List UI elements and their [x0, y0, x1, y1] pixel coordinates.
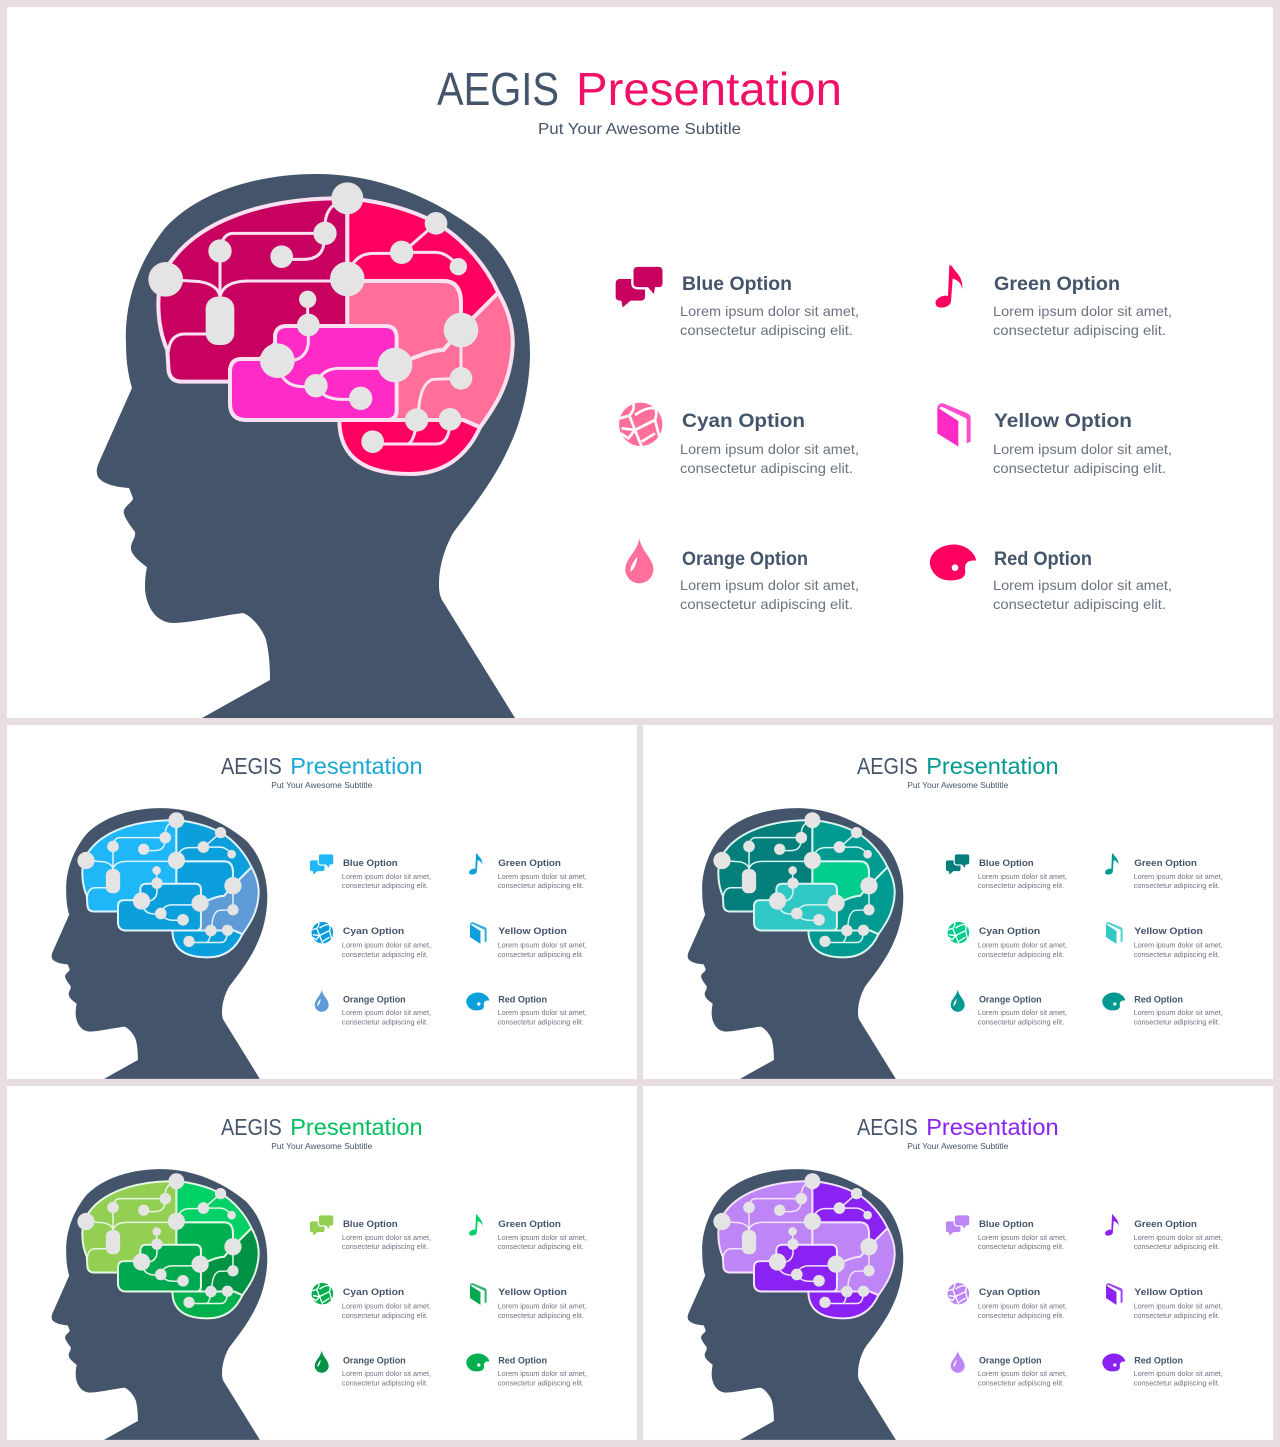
- option: Yellow Option: Yellow Option: [1134, 1287, 1203, 1298]
- option: Yellow Option: consectetur adipiscing elit.: [498, 1313, 584, 1320]
- option: Red Option: consectetur adipiscing elit.: [498, 1381, 584, 1388]
- option: Blue Option: Blue Option: [979, 1219, 1034, 1230]
- option: Blue Option: Blue Option: [682, 274, 792, 295]
- option: Yellow Option: Lorem ipsum dolor sit amet,: [498, 1303, 587, 1310]
- option: Red Option: [1134, 995, 1223, 1027]
- subtitle: Put Your Awesome Subtitle: [271, 781, 373, 790]
- icon: water drop: [315, 989, 329, 1012]
- option: Green Option: [498, 1219, 587, 1251]
- option: Green Option: Lorem ipsum dolor sit amet,: [993, 303, 1172, 319]
- option: Red Option: Red Option: [1134, 1356, 1183, 1367]
- option: Yellow Option: Yellow Option: [1134, 926, 1203, 937]
- option: Yellow Option: Yellow Option: [994, 411, 1132, 432]
- option: Red Option: Red Option: [498, 1356, 547, 1367]
- brain circuit diagram: [77, 1173, 259, 1318]
- icon: music note: [469, 853, 483, 875]
- option: Green Option: Green Option: [498, 1219, 561, 1230]
- icon: globe: [948, 922, 969, 944]
- subtitle: Put Your Awesome Subtitle: [271, 1142, 373, 1151]
- option: Cyan Option: Cyan Option: [979, 926, 1040, 937]
- option: Green Option: [1134, 1219, 1223, 1251]
- option: Orange Option: Orange Option: [682, 549, 808, 570]
- option: Cyan Option: [680, 411, 859, 476]
- title: AEGIS: [221, 753, 282, 779]
- option: Green Option: [498, 858, 587, 890]
- option: Orange Option: [342, 995, 431, 1027]
- option: Green Option: consectetur adipiscing elit.: [993, 322, 1166, 338]
- icon: speech bubbles: [310, 1215, 334, 1235]
- option: Blue Option: Lorem ipsum dolor sit amet,: [978, 1235, 1067, 1242]
- option: Yellow Option: [498, 926, 587, 959]
- option: Cyan Option: Lorem ipsum dolor sit amet,: [342, 1303, 431, 1310]
- option: Yellow Option: [993, 411, 1172, 476]
- panel: purple slide: [643, 1086, 1273, 1440]
- option: Cyan Option: Cyan Option: [343, 926, 404, 937]
- title: AEGIS: [221, 1114, 282, 1140]
- option: Orange Option: [342, 1356, 431, 1388]
- option: Orange Option: Lorem ipsum dolor sit amet,: [978, 1371, 1067, 1378]
- option: Orange Option: Lorem ipsum dolor sit amet,: [680, 577, 859, 593]
- option: Cyan Option: Cyan Option: [682, 411, 805, 432]
- option: Yellow Option: Lorem ipsum dolor sit amet,: [1134, 942, 1223, 949]
- option: Blue Option: [342, 1219, 431, 1251]
- option: Red Option: Lorem ipsum dolor sit amet,: [993, 577, 1172, 593]
- option: Red Option: consectetur adipiscing elit.: [1134, 1020, 1220, 1027]
- option: Yellow Option: consectetur adipiscing elit.: [1134, 1313, 1220, 1320]
- option: Orange Option: consectetur adipiscing elit.: [342, 1020, 428, 1027]
- option: Red Option: Red Option: [498, 995, 547, 1006]
- icon: music note: [469, 1214, 483, 1236]
- option: Orange Option: Orange Option: [343, 1356, 406, 1367]
- option: Green Option: Green Option: [1134, 1219, 1197, 1230]
- option: Green Option: Lorem ipsum dolor sit amet,: [498, 874, 587, 881]
- icon: globe: [948, 1283, 969, 1305]
- option: Cyan Option: [342, 926, 431, 959]
- brain circuit diagram: [713, 812, 895, 957]
- option: Green Option: Lorem ipsum dolor sit amet,: [1134, 874, 1223, 881]
- icon: speech bubbles: [946, 854, 970, 874]
- title: Presentation: [290, 1114, 423, 1140]
- option: Red Option: Lorem ipsum dolor sit amet,: [498, 1371, 587, 1378]
- option: Orange Option: Orange Option: [979, 995, 1042, 1006]
- option: Red Option: [993, 549, 1172, 612]
- option: Red Option: consectetur adipiscing elit.: [993, 596, 1166, 612]
- option: Red Option: Lorem ipsum dolor sit amet,: [498, 1010, 587, 1017]
- title: Presentation: [290, 753, 423, 779]
- panel: green slide: [7, 1086, 637, 1440]
- icon: palette: [1102, 1354, 1125, 1371]
- option: Blue Option: consectetur adipiscing elit.: [978, 883, 1064, 890]
- option: Green Option: Lorem ipsum dolor sit amet,: [1134, 1235, 1223, 1242]
- title: Presentation: [576, 63, 842, 115]
- option: Blue Option: consectetur adipiscing elit.: [680, 322, 853, 338]
- icon: speech bubbles: [310, 854, 334, 874]
- icon: book: [937, 403, 971, 447]
- option: Green Option: consectetur adipiscing elit.: [1134, 1244, 1220, 1251]
- option: Cyan Option: Cyan Option: [343, 1287, 404, 1298]
- option: Yellow Option: Lorem ipsum dolor sit amet,: [498, 942, 587, 949]
- icon: speech bubbles: [616, 266, 664, 307]
- option: Orange Option: consectetur adipiscing elit.: [680, 596, 853, 612]
- icon: palette: [1102, 993, 1125, 1010]
- icon: music note: [935, 265, 962, 308]
- option: Blue Option: [342, 858, 431, 890]
- option: Blue Option: Lorem ipsum dolor sit amet,: [342, 874, 431, 881]
- option: Cyan Option: [342, 1287, 431, 1320]
- option: Yellow Option: consectetur adipiscing elit.: [498, 952, 584, 959]
- icon: book: [470, 922, 487, 944]
- option: Green Option: consectetur adipiscing elit.: [498, 883, 584, 890]
- option: Green Option: consectetur adipiscing elit.: [1134, 883, 1220, 890]
- option: Orange Option: consectetur adipiscing elit.: [342, 1381, 428, 1388]
- title: AEGIS: [857, 753, 918, 779]
- title: Presentation: [926, 753, 1059, 779]
- option: Red Option: Lorem ipsum dolor sit amet,: [1134, 1010, 1223, 1017]
- icon: globe: [312, 1283, 333, 1305]
- option: Yellow Option: Lorem ipsum dolor sit amet,: [1134, 1303, 1223, 1310]
- option: Green Option: Green Option: [994, 274, 1120, 295]
- option: Blue Option: consectetur adipiscing elit.: [342, 1244, 428, 1251]
- option: Green Option: [993, 274, 1172, 338]
- option: Red Option: Red Option: [994, 549, 1092, 570]
- icon: music note: [1105, 1214, 1119, 1236]
- subtitle: Put Your Awesome Subtitle: [907, 1142, 1009, 1151]
- option: Blue Option: Lorem ipsum dolor sit amet,: [680, 303, 859, 319]
- head silhouette: [97, 174, 530, 718]
- option: Cyan Option: consectetur adipiscing elit.: [342, 1313, 428, 1320]
- icon: water drop: [951, 1350, 965, 1373]
- icon: water drop: [315, 1350, 329, 1373]
- option: Blue Option: Blue Option: [343, 1219, 398, 1230]
- icon: water drop: [951, 989, 965, 1012]
- option: Blue Option: consectetur adipiscing elit.: [978, 1244, 1064, 1251]
- option: Cyan Option: Lorem ipsum dolor sit amet,: [978, 1303, 1067, 1310]
- option: Cyan Option: Lorem ipsum dolor sit amet,: [342, 942, 431, 949]
- brain circuit diagram: [713, 1173, 895, 1318]
- panel: teal slide: [643, 725, 1273, 1079]
- option: Orange Option: Lorem ipsum dolor sit amet,: [978, 1010, 1067, 1017]
- icon: book: [470, 1283, 487, 1305]
- icon: book: [1106, 922, 1123, 944]
- brain circuit diagram: [148, 182, 513, 474]
- option: Yellow Option: consectetur adipiscing elit.: [1134, 952, 1220, 959]
- option: Red Option: Red Option: [1134, 995, 1183, 1006]
- option: Cyan Option: consectetur adipiscing elit.: [680, 460, 853, 476]
- option: Cyan Option: consectetur adipiscing elit.: [978, 952, 1064, 959]
- option: Blue Option: Blue Option: [979, 858, 1034, 869]
- icon: music note: [1105, 853, 1119, 875]
- option: Red Option: [498, 1356, 587, 1388]
- option: Blue Option: [680, 274, 859, 338]
- head silhouette: [688, 808, 903, 1079]
- option: Blue Option: [978, 1219, 1067, 1251]
- option: Orange Option: Lorem ipsum dolor sit amet,: [342, 1010, 431, 1017]
- option: Orange Option: Lorem ipsum dolor sit amet,: [342, 1371, 431, 1378]
- option: Cyan Option: Lorem ipsum dolor sit amet,: [680, 441, 859, 457]
- option: Yellow Option: Yellow Option: [498, 926, 567, 937]
- option: Orange Option: [978, 1356, 1067, 1388]
- brain circuit diagram: [77, 812, 259, 957]
- option: Yellow Option: Yellow Option: [498, 1287, 567, 1298]
- panel: main pink slide: [7, 7, 1273, 718]
- head silhouette: [52, 808, 267, 1079]
- option: Orange Option: [978, 995, 1067, 1027]
- option: Cyan Option: [978, 1287, 1067, 1320]
- title: Presentation: [926, 1114, 1059, 1140]
- option: Cyan Option: consectetur adipiscing elit.: [342, 952, 428, 959]
- option: Yellow Option: consectetur adipiscing elit.: [993, 460, 1166, 476]
- option: Orange Option: Orange Option: [979, 1356, 1042, 1367]
- option: Yellow Option: [1134, 926, 1223, 959]
- option: Red Option: consectetur adipiscing elit.: [1134, 1381, 1220, 1388]
- option: Red Option: Lorem ipsum dolor sit amet,: [1134, 1371, 1223, 1378]
- icon: book: [1106, 1283, 1123, 1305]
- option: Orange Option: [680, 549, 859, 612]
- option: Yellow Option: Lorem ipsum dolor sit amet,: [993, 441, 1172, 457]
- option: Blue Option: Lorem ipsum dolor sit amet,: [342, 1235, 431, 1242]
- icon: palette: [466, 993, 489, 1010]
- icon: speech bubbles: [946, 1215, 970, 1235]
- panel: blue slide: [7, 725, 637, 1079]
- option: Green Option: consectetur adipiscing elit.: [498, 1244, 584, 1251]
- icon: globe: [619, 403, 662, 447]
- option: Green Option: Green Option: [1134, 858, 1197, 869]
- option: Cyan Option: Lorem ipsum dolor sit amet,: [978, 942, 1067, 949]
- option: Blue Option: Lorem ipsum dolor sit amet,: [978, 874, 1067, 881]
- head silhouette: [52, 1169, 267, 1440]
- icon: globe: [312, 922, 333, 944]
- icon: water drop: [625, 538, 653, 583]
- option: Green Option: [1134, 858, 1223, 890]
- subtitle: Put Your Awesome Subtitle: [907, 781, 1009, 790]
- icon: palette: [466, 1354, 489, 1371]
- option: Cyan Option: consectetur adipiscing elit.: [978, 1313, 1064, 1320]
- option: Blue Option: Blue Option: [343, 858, 398, 869]
- option: Green Option: Green Option: [498, 858, 561, 869]
- head silhouette: [688, 1169, 903, 1440]
- option: Red Option: [498, 995, 587, 1027]
- option: Yellow Option: [498, 1287, 587, 1320]
- option: Red Option: [1134, 1356, 1223, 1388]
- option: Orange Option: consectetur adipiscing elit.: [978, 1020, 1064, 1027]
- option: Orange Option: Orange Option: [343, 995, 406, 1006]
- option: Cyan Option: [978, 926, 1067, 959]
- option: Orange Option: consectetur adipiscing elit.: [978, 1381, 1064, 1388]
- title: AEGIS: [437, 63, 559, 115]
- option: Blue Option: consectetur adipiscing elit.: [342, 883, 428, 890]
- subtitle: Put Your Awesome Subtitle: [538, 121, 741, 138]
- option: Green Option: Lorem ipsum dolor sit amet,: [498, 1235, 587, 1242]
- option: Blue Option: [978, 858, 1067, 890]
- option: Yellow Option: [1134, 1287, 1223, 1320]
- option: Cyan Option: Cyan Option: [979, 1287, 1040, 1298]
- icon: palette: [930, 545, 976, 580]
- title: AEGIS: [857, 1114, 918, 1140]
- option: Red Option: consectetur adipiscing elit.: [498, 1020, 584, 1027]
